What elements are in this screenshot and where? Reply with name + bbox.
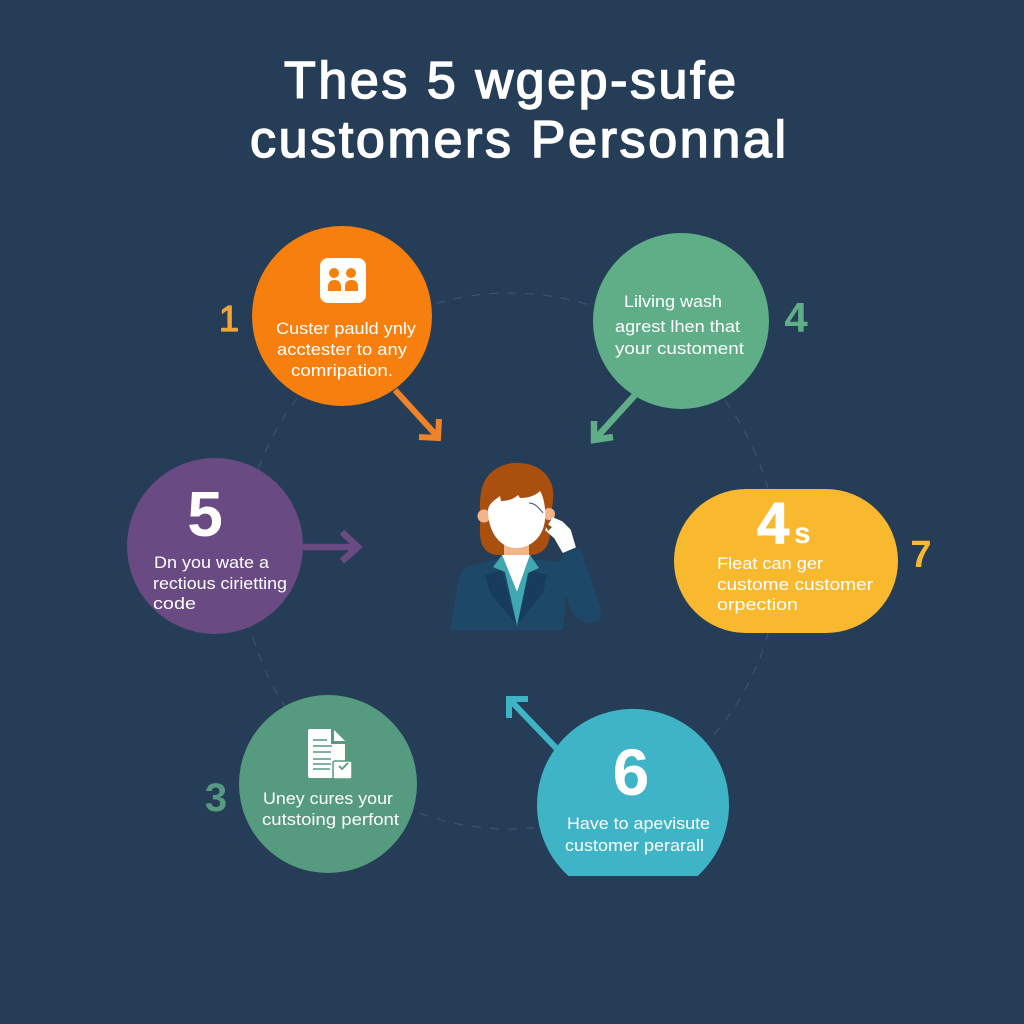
arrow: step 4 to person — [594, 395, 635, 440]
text: step 4s: orpection — [717, 596, 798, 614]
text: step 3: Uney cures your — [263, 790, 394, 808]
title: customers Personnal — [250, 111, 786, 169]
heading: 4s: s — [794, 517, 811, 550]
text: step 6: Have to apevisute — [567, 815, 710, 833]
number 7: 7 — [910, 534, 932, 576]
text: step 3 — [262, 790, 399, 829]
arrow: step 1 to person — [395, 390, 439, 438]
panel: step 3 green — [239, 695, 417, 873]
panel: step 1 orange — [252, 226, 432, 406]
panel: step 4 green — [593, 233, 769, 409]
arrow: step 6 to person — [509, 699, 557, 749]
text: step 4 — [615, 293, 744, 358]
panel: step 4s yellow — [674, 489, 898, 633]
title: Thes 5 wgep-sufe — [284, 52, 736, 110]
number 1: 1 — [219, 298, 239, 339]
text: step 6 — [565, 815, 710, 855]
text: step 6: customer perarall — [565, 837, 704, 855]
text: step 5: Dn you wate a — [154, 554, 270, 572]
panel: step 6 teal — [537, 709, 729, 876]
text: step 4: Lilving wash — [624, 293, 722, 311]
text: step 4s: Fleat can ger — [717, 555, 824, 573]
panel: step 5 purple — [127, 458, 303, 634]
number 4: 4 — [784, 294, 808, 341]
text: step 1: Custer pauld ynly — [276, 320, 417, 338]
heading: 4s: 4 — [757, 491, 789, 556]
text: step 1 — [276, 320, 417, 380]
text: step 3: cutstoing perfont — [262, 811, 399, 829]
number 6: 6 — [613, 735, 649, 809]
text: step 5: rectious cirietting — [153, 575, 287, 593]
number 5: 5 — [187, 478, 223, 550]
text: step 4s: custome customer — [717, 576, 874, 594]
icon: central person on phone — [450, 463, 601, 630]
icon: people — [320, 258, 366, 303]
title — [250, 52, 786, 169]
text: step 5: code — [153, 595, 196, 613]
icon: document with check — [308, 729, 352, 779]
text: step 1: acctester to any — [277, 341, 408, 359]
heading: 4s — [757, 491, 811, 556]
number 3: 3 — [205, 776, 227, 820]
arrow: step 5 to person — [303, 532, 358, 561]
text: step 1: comripation. — [291, 362, 393, 380]
text: step 4s — [717, 555, 874, 614]
text: step 4: agrest lhen that — [615, 318, 740, 336]
text: step 4: your customent — [615, 340, 744, 358]
text: step 5 — [153, 554, 287, 613]
